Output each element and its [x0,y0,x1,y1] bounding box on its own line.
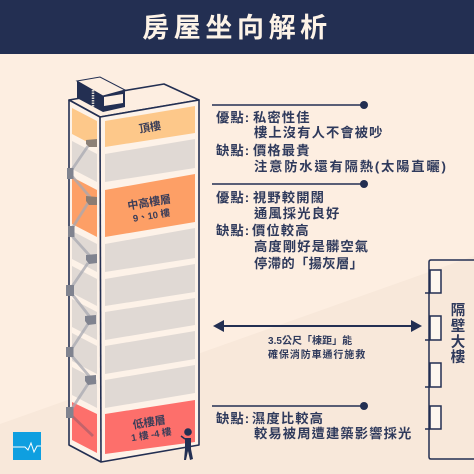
distance note: 確保消防車通行施救 [268,348,366,361]
callout: mid-high floors [212,180,369,271]
neighbor building label: 壁 [451,317,465,335]
callout: top floor: 優點: [216,110,250,125]
neighbor windows [425,270,441,429]
callout: low floors [212,402,412,441]
person icon [181,428,193,460]
neighbor building label: 樓 [451,348,466,366]
header band [0,0,474,54]
callout: mid-high floors: 高度剛好是髒空氣 [254,238,369,254]
callout: top floor: 價格最貴 [253,142,311,158]
arrow: building distance [213,320,422,332]
callout: mid-high floors: 缺點: [216,223,250,238]
distance note: 3.5公尺「棟距」能 [268,334,353,347]
callout: mid-high floors: 優點: [216,190,250,205]
neighbor building label: 隔 [451,302,465,319]
callout: top floor: 樓上沒有人不會被吵 [254,124,384,140]
logo [13,432,41,460]
callout: mid-high floors: 停滯的「揚灰層」 [254,255,364,271]
building [66,77,199,462]
building body outline [69,100,199,462]
title: 房屋坐向解析 [142,13,332,43]
floor label: mid-high floors: 9、10 樓 [132,207,171,225]
floor label: mid-high floors [126,192,174,225]
neighboring building [425,260,474,459]
roof outline [69,84,199,117]
callout: low floors: 缺點: [216,411,250,426]
distance note [268,334,366,361]
fire escape stairs [66,139,97,436]
floor label: low floors [128,412,173,444]
left face floors [72,108,97,453]
callout: top floor: 私密性佳 [253,109,311,125]
callout: mid-high floors: 視野較開闊 [253,189,325,205]
callout: top floor: 缺點: [216,143,250,158]
right face floors [105,106,195,454]
front corner edge [100,117,101,462]
callout: top floor [212,101,447,174]
floor label: low floors: 1 樓 -4 樓 [130,426,173,444]
callout: mid-high floors: 通風採光良好 [254,205,340,221]
rooftop unit [77,77,125,112]
floor label: low floors: 低樓層 [132,412,167,432]
floor label: mid-high floors: 中高樓層 [126,192,172,213]
neighbor building label: 大 [451,334,466,351]
callout: top floor: 注意防水還有隔熱(太陽直曬) [254,158,447,174]
callout: low floors: 濕度比較高 [252,410,324,426]
callout: low floors: 較易被周遭建築影響採光 [254,425,412,441]
floor label: top floor: 頂樓 [138,118,162,136]
callout: mid-high floors: 價位較高 [252,222,310,238]
neighbor building label [451,302,466,366]
